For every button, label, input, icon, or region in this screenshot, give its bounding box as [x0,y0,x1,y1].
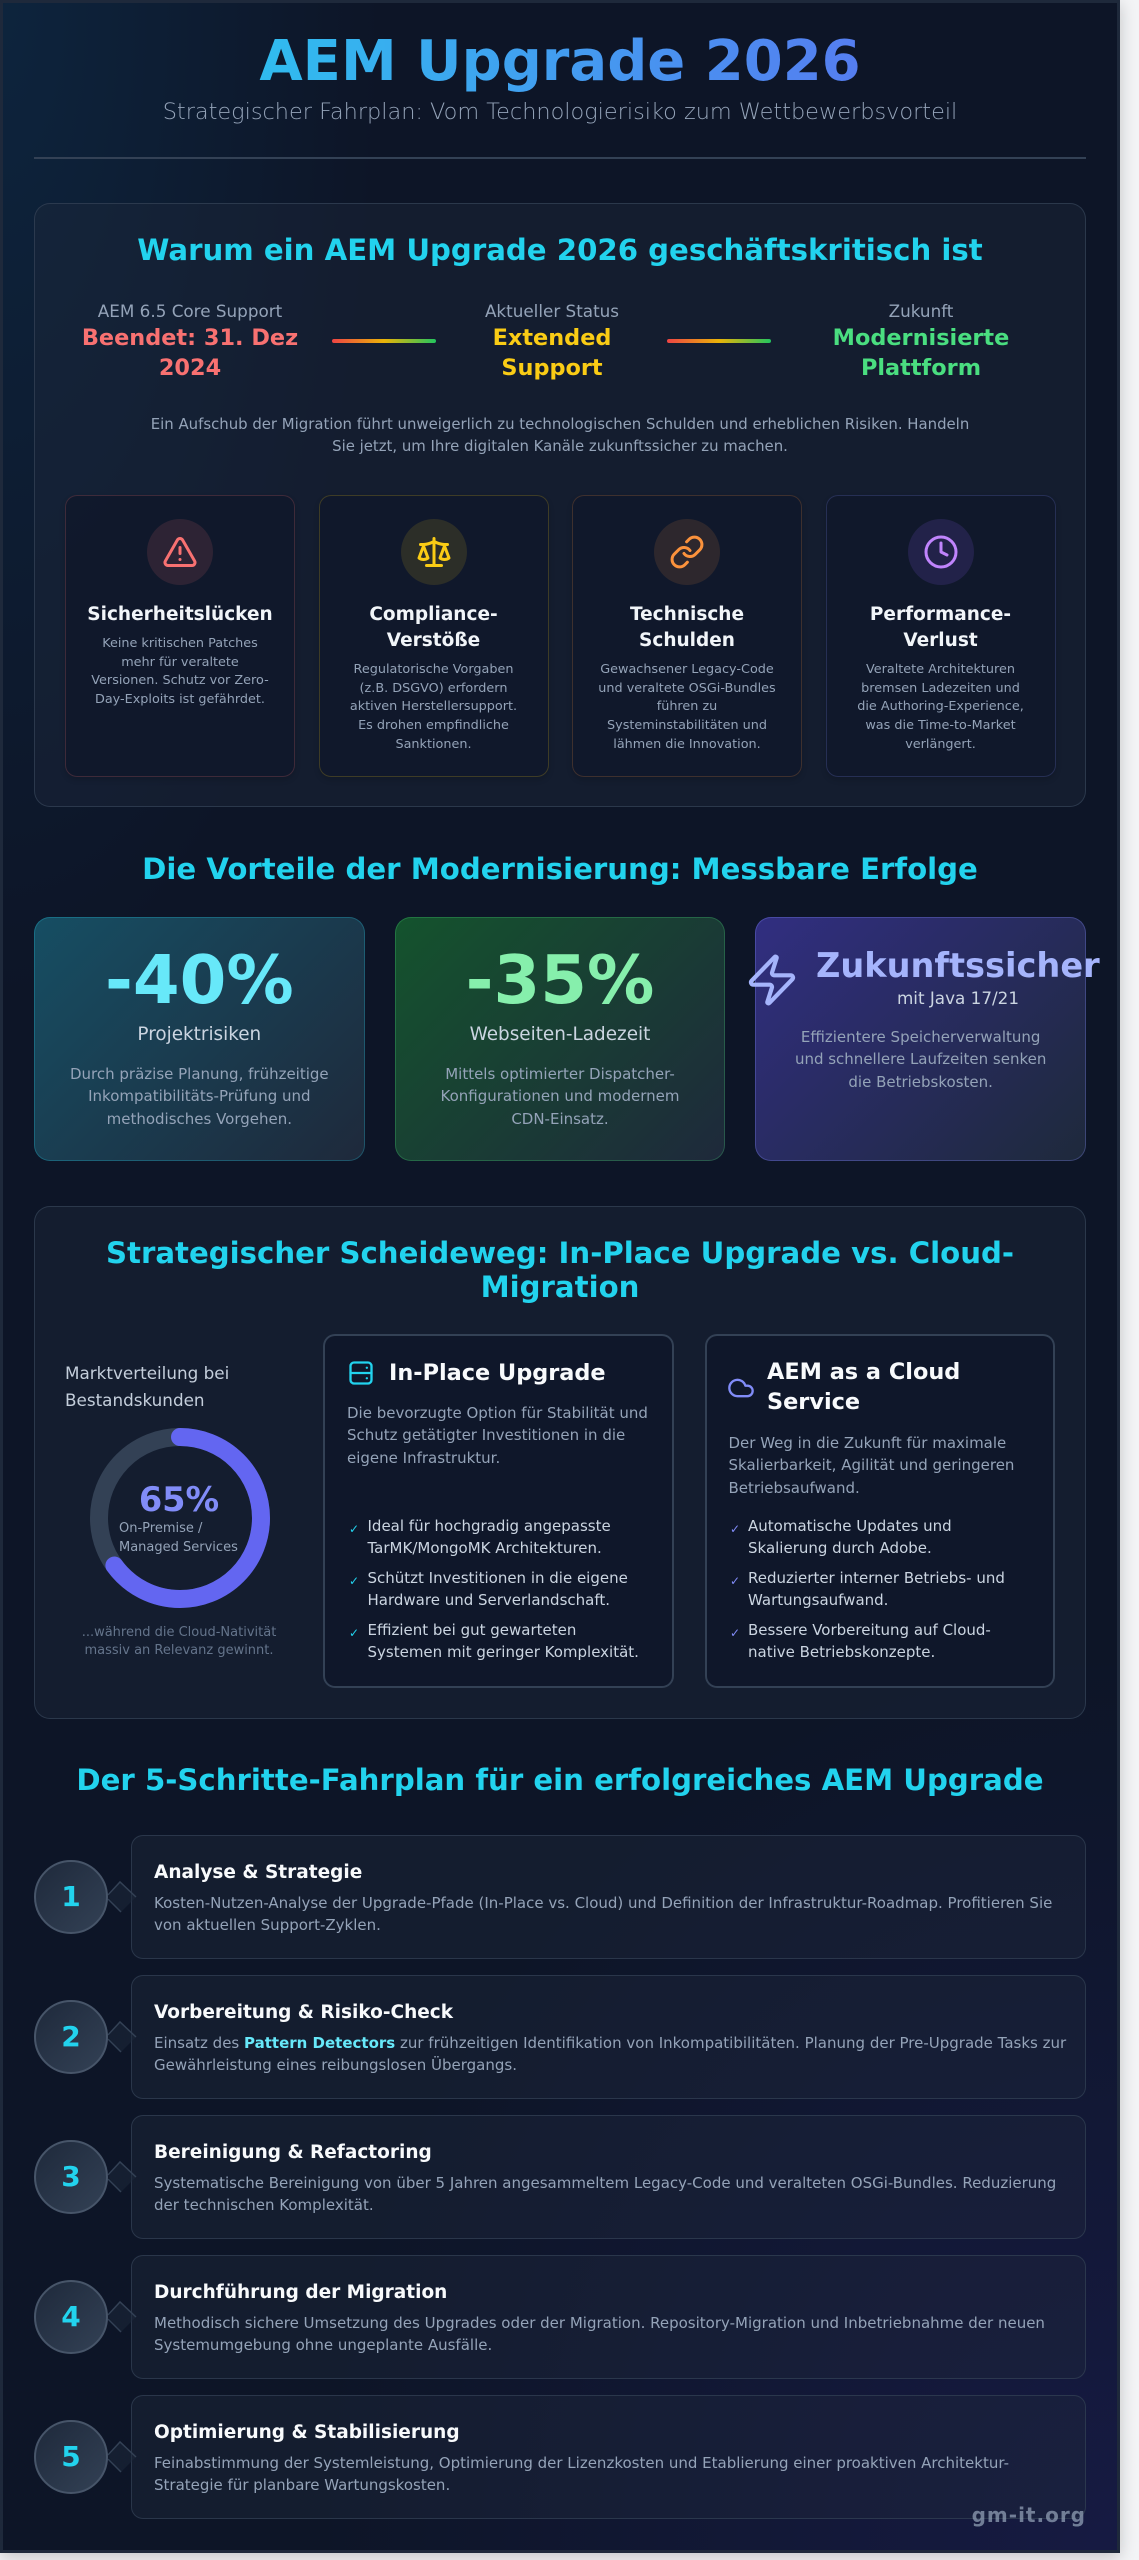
donut footnote: massiv an Relevanz gewinnt. [84,1643,274,1658]
card text: Regulatorische Vorgaben [354,662,513,677]
step number [34,2000,108,2074]
arrow: diamond connector [106,2435,140,2479]
step number [34,2280,108,2354]
title: AEM Upgrade 2026 [259,29,861,94]
check list: ✓ [349,1574,359,1588]
intro text [151,415,969,455]
card text: was die Time-to-Market [865,718,1016,733]
card title: Schulden [639,630,735,650]
donut caption: Marktverteilung bei [65,1363,229,1383]
check list: ✓ [730,1574,740,1588]
icon: link [654,519,720,585]
panel: why business critical [34,203,1086,807]
metric card: page load [395,917,725,1161]
step 5 [34,2395,1086,2519]
arrow: connector two [667,339,771,343]
heading: benefits: Die Vorteile der Modernisierung: Messbare Erfolge [142,852,978,886]
check list: Automatische Updates und [748,1517,952,1535]
card text: bremsen Ladezeiten und [861,681,1020,696]
title [34,27,1086,97]
arrow: diamond connector [108,1881,136,1912]
heading: roadmap: Der 5-Schritte-Fahrplan für ein erfolgreiches AEM Upgrade [76,1763,1044,1797]
heading: crossroads: Migration [481,1270,639,1304]
step card [131,2395,1086,2519]
card text: mehr für veraltete [121,655,239,670]
metric text [70,1065,329,1128]
watermark: gm-it.org [972,2503,1086,2527]
step text: von aktuellen Support-Zyklen. [154,1916,381,1934]
step text: der technischen Komplexität. [154,2196,374,2214]
step title: Vorbereitung & Risiko-Check [154,2002,453,2022]
icon: clock [908,519,974,585]
check list: ✓ [349,1522,359,1536]
arrow: connector one [332,339,436,343]
step number: 3 [61,2160,81,2193]
status: future platform [833,301,1009,381]
step text: Einsatz des Pattern Detectors zur frühzeitigen Identifikation von Inkompatibilitäten. Planung der Pre-Upgrade Tasks zur [154,2034,1066,2052]
step text: Methodisch sichere Umsetzung des Upgrades oder der Migration. Repository-Migration und Inbetriebnahme der neuen [154,2314,1045,2332]
metric text: Durch präzise Planung, frühzeitige [70,1065,329,1083]
icon: lightning bolt [748,954,796,1006]
option title: In-Place Upgrade [389,1360,606,1386]
step number: 5 [61,2440,81,2473]
option title: Service [767,1389,860,1415]
step title: Optimierung & Stabilisierung [154,2422,460,2442]
card text: Sanktionen. [395,737,472,752]
step text [154,2452,1009,2497]
heading: crossroads: Strategischer Scheideweg: In-Place Upgrade vs. Cloud- [106,1236,1014,1270]
check list: Systemen mit geringer Komplexität. [368,1643,639,1661]
step text: Gewährleistung eines reibungslosen Übergangs. [154,2056,517,2074]
check list: Ideal für hochgradig angepasste [368,1517,611,1535]
panel: strategic crossroads [34,1206,1086,1719]
donut value: 65% [139,1480,219,1519]
risk card: technical debt [572,495,802,777]
check list: native Betriebskonzepte. [748,1643,935,1661]
metric value: -35% [466,941,654,1019]
card text [598,662,776,752]
card text: aktiven Herstellersupport. [350,699,517,714]
check list: TarMK/MongoMK Architekturen. [368,1539,602,1557]
check list: Skalierung durch Adobe. [748,1539,932,1557]
status: core support ended [82,301,298,381]
metric text: Inkompatibilitäts-Prüfung und [88,1087,311,1105]
icon: warning triangle [147,519,213,585]
step title: Durchführung der Migration [154,2282,447,2302]
check list: Schützt Investitionen in die eigene [368,1569,628,1587]
option card: cloud service [705,1334,1055,1688]
card text [350,662,517,752]
card text: die Authoring-Experience, [857,699,1024,714]
card title: Verlust [903,630,978,650]
step number: 2 [61,2020,81,2053]
metric card: project risks [34,917,365,1161]
status: future platform: Modernisierte [833,325,1009,351]
card text: Day-Exploits ist gefährdet. [95,692,265,707]
check list: Hardware und Serverlandschaft. [368,1591,610,1609]
heading: why critical: Warum ein AEM Upgrade 2026 geschäftskritisch ist [137,233,983,267]
check list [349,1517,639,1661]
check list: Wartungsaufwand. [748,1591,888,1609]
status: extended support: Support [501,355,603,381]
card text: Versionen. Schutz vor Zero- [91,673,269,688]
card text: Gewachsener Legacy-Code [600,662,774,677]
step text: Strategie für planbare Wartungskosten. [154,2476,450,2494]
card title: Compliance- [369,604,498,624]
metric text [795,1028,1046,1091]
step number [34,2140,108,2214]
status: future platform: Zukunft [889,301,953,321]
metric text: methodisches Vorgehen. [107,1110,292,1128]
arrow: diamond connector [108,2021,136,2052]
risk card: compliance [318,495,548,777]
step 3 [34,2115,1086,2239]
option text: Skalierbarkeit, Agilität und geringeren [728,1456,1014,1474]
metric label: Projektrisiken [137,1024,261,1045]
card text: verlängert. [905,737,976,752]
card text [91,636,269,707]
intro text: Sie jetzt, um Ihre digitalen Kanäle zukunftssicher zu machen. [332,437,788,455]
status: extended support: Extended [493,325,611,351]
step text: Feinabstimmung der Systemleistung, Optimierung der Lizenzkosten und Etablierung einer proaktiven Architektur- [154,2454,1009,2472]
metric value: -40% [105,941,294,1019]
status: future platform: Plattform [861,355,981,381]
risk card: performance [826,495,1056,777]
step number: 1 [61,1880,81,1913]
card title: Technische [630,604,744,624]
card text [857,662,1024,752]
option text [347,1404,648,1467]
step text [154,2314,1045,2354]
donut footnote [82,1625,276,1658]
option text [728,1434,1014,1497]
option card: in-place upgrade [323,1334,674,1688]
card text: Veraltete Architekturen [866,662,1015,677]
market share column [65,1363,276,1658]
donut label: Managed Services [119,1540,238,1554]
card title: Sicherheitslücken [87,604,273,624]
card title: Performance- [870,604,1011,624]
step text [154,1894,1052,1934]
icon: server [349,1361,373,1385]
step text: Systematische Bereinigung von über 5 Jahren angesammeltem Legacy-Code und veralteten OSGi-Bundles. Reduzierung [154,2174,1056,2192]
arrow: diamond connector [108,2161,136,2192]
status: core support ended: Beendet: 31. Dez [82,325,298,351]
step card [131,1835,1086,1959]
status: extended support [485,301,619,381]
metric label: Webseiten-Ladezeit [470,1024,650,1045]
metric text [440,1065,679,1128]
step 4 [34,2255,1086,2379]
check list: Reduzierter interner Betriebs- und [748,1569,1005,1587]
card text: Es drohen empfindliche [358,718,509,733]
intro text: Ein Aufschub der Migration führt unweigerlich zu technologischen Schulden und erheblichen Risiken. Handeln [151,415,969,433]
donut caption: Bestandskunden [65,1390,205,1410]
step title: Analyse & Strategie [154,1862,362,1882]
step 2 [34,1975,1086,2099]
donut label [119,1520,238,1554]
step text: Kosten-Nutzen-Analyse der Upgrade-Pfade (In-Place vs. Cloud) und Definition der Infrastruktur-Roadmap. Profitieren Sie [154,1894,1052,1912]
step text: Systemumgebung ohne ungeplante Ausfälle. [154,2336,492,2354]
step text [154,2174,1056,2214]
metric value: Zukunftssicher [816,946,1100,985]
card title [870,604,1011,650]
donut label: On-Premise / [119,1520,202,1536]
metric text: Konfigurationen und modernem [440,1087,679,1105]
metric text: die Betriebskosten. [848,1073,993,1091]
card text: Systeminstabilitäten und [607,718,767,733]
option text: Der Weg in die Zukunft für maximale [728,1434,1006,1452]
step card [131,2255,1086,2379]
donut caption [65,1363,229,1410]
option text: eigene Infrastruktur. [347,1449,500,1467]
donut chart [90,1428,270,1608]
heading: crossroads [106,1236,1014,1304]
option text: Die bevorzugte Option für Stabilität und [347,1404,648,1422]
metric card: future proof [755,917,1086,1161]
check list: ✓ [349,1626,359,1640]
step number: 4 [61,2300,81,2333]
step title: Bereinigung & Refactoring [154,2142,432,2162]
icon: scales [400,519,466,585]
option text: Schutz getätigter Investitionen in die [347,1426,625,1444]
step number [34,2420,108,2494]
card text: (z.B. DSGVO) erfordern [360,681,507,696]
card title [369,604,498,650]
step card [131,2115,1086,2239]
metric text: und schnellere Laufzeiten senken [795,1050,1046,1068]
card title [630,604,744,650]
risk card: security [65,495,295,777]
option text: Betriebsaufwand. [728,1479,860,1497]
icon: cloud [728,1378,754,1398]
metric text: Effizientere Speicherverwaltung [801,1028,1040,1046]
status: core support ended: 2024 [159,355,221,381]
card text: führen zu [657,699,717,714]
metric text: Mittels optimierter Dispatcher- [445,1065,675,1083]
check list: ✓ [730,1626,740,1640]
option title [767,1359,960,1415]
card text: und veraltete OSGi-Bundles [598,681,776,696]
subtitle: Strategischer Fahrplan: Vom Technologierisiko zum Wettbewerbsvorteil [163,99,957,125]
arrow: diamond connector [108,2301,136,2332]
step card [131,1975,1086,2099]
check list: ✓ [730,1522,740,1536]
step text [154,2034,1066,2074]
metric label: mit Java 17/21 [897,988,1019,1008]
card title: Verstöße [387,630,480,650]
card text: Keine kritischen Patches [102,636,258,651]
status: extended support: Aktueller Status [485,301,619,321]
check list: Bessere Vorbereitung auf Cloud- [748,1621,991,1639]
metric text: CDN-Einsatz. [511,1110,609,1128]
donut footnote: ...während die Cloud-Nativität [82,1625,276,1640]
status: core support ended: AEM 6.5 Core Support [98,301,282,321]
check list: Effizient bei gut gewarteten [368,1621,576,1639]
option title: AEM as a Cloud [767,1359,960,1385]
step number [34,1860,108,1934]
card text: lähmen die Innovation. [613,737,761,752]
step 1 [34,1835,1086,1959]
check list [730,1517,1005,1661]
